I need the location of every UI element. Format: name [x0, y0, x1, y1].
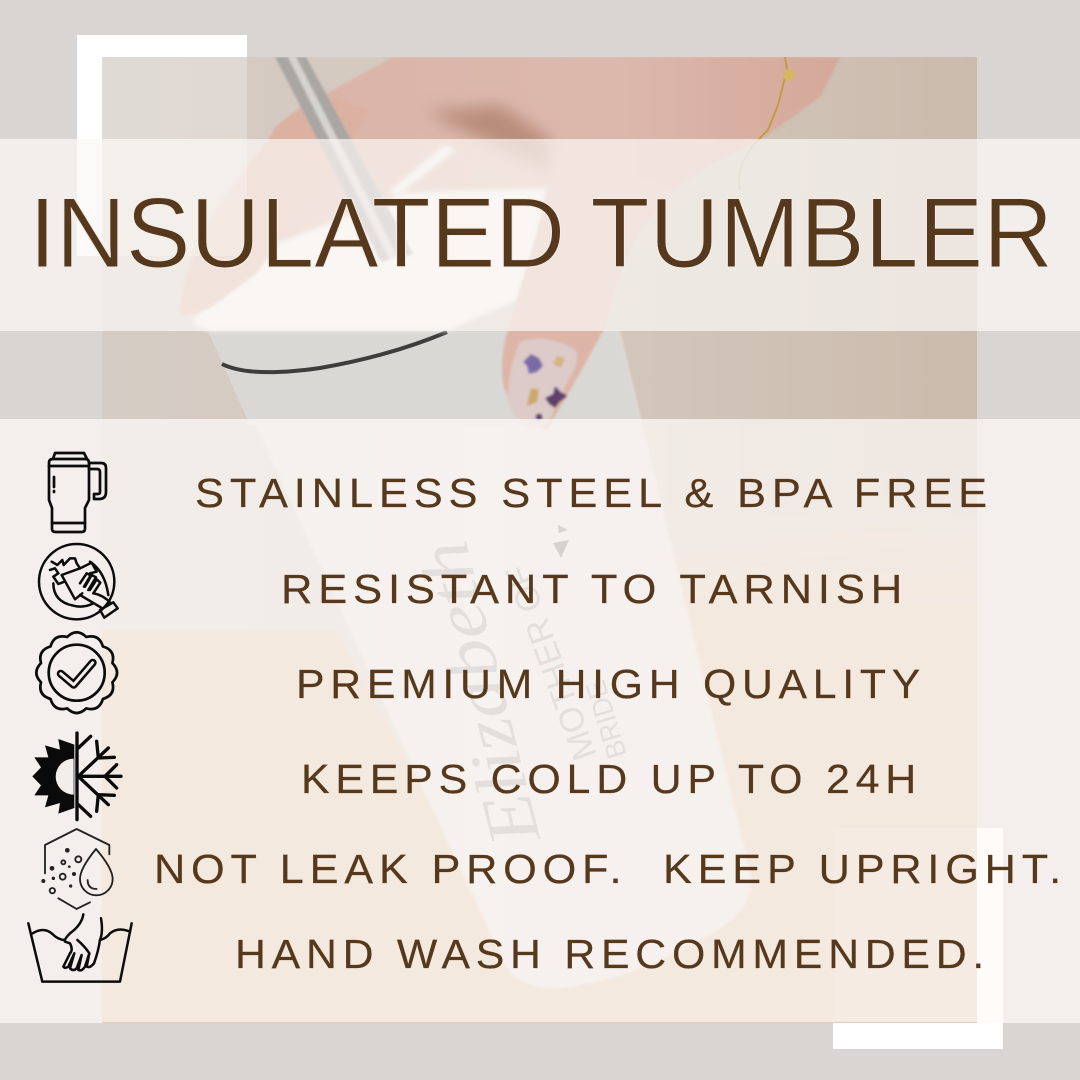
icon: hand wash basin [28, 914, 132, 982]
nail [508, 339, 577, 428]
feature text: hand wash: HAND WASH RECOMMENDED. [235, 931, 990, 977]
straw [275, 57, 413, 262]
tumbler body [436, 331, 752, 988]
table surface: left [102, 631, 500, 1022]
tumbler lid [194, 188, 547, 331]
feature text: keeps cold: KEEPS COLD UP TO 24H [301, 756, 922, 802]
thumb [501, 228, 604, 428]
tumbler rim line [222, 332, 447, 372]
features panel [0, 419, 1080, 1023]
tumbler engraving [422, 541, 626, 841]
feature text: stainless steel: STAINLESS STEEL & BPA FREE [195, 470, 993, 516]
white corner frame: top left [77, 35, 247, 256]
table surface: right [560, 470, 990, 620]
bracelet charm [783, 69, 795, 81]
lid highlight [388, 145, 455, 196]
bracelet [758, 57, 787, 140]
icon: quality badge with check [36, 632, 117, 713]
photo base edge [102, 1022, 977, 1023]
icon: shield with dots and water drop [41, 829, 113, 909]
title band [0, 139, 1080, 331]
white veil: top left frame over photo [102, 57, 247, 256]
tumbler upper grey [208, 331, 618, 419]
feature text: not leak proof: NOT LEAK PROOF. KEEP UPRIGHT. [154, 846, 1067, 892]
feature text: resistant to tarnish: RESISTANT TO TARNISH [281, 566, 908, 612]
index finger [182, 113, 295, 314]
tumbler engraving: Elizabeth [403, 533, 556, 855]
white corner frame: bottom right [833, 828, 1003, 1049]
hand shadow [427, 105, 550, 172]
tumbler engraving: BRIDE [580, 677, 633, 762]
icon: hand wiping a plate [39, 544, 118, 619]
hand back [272, 57, 840, 234]
bracelet chain [739, 140, 758, 190]
icon: tumbler with handle [49, 453, 106, 532]
white veil: bottom right frame over photo [833, 828, 977, 1023]
icon: sun and snowflake [32, 733, 121, 820]
tumbler engraving: MOTHER OF [499, 560, 605, 765]
feature text: premium high quality: PREMIUM HIGH QUALITY [296, 661, 926, 707]
tumbler small logo [553, 525, 569, 558]
title: INSULATED TUMBLER [29, 177, 1053, 288]
photo: hand holding tumbler [90, 57, 990, 1040]
